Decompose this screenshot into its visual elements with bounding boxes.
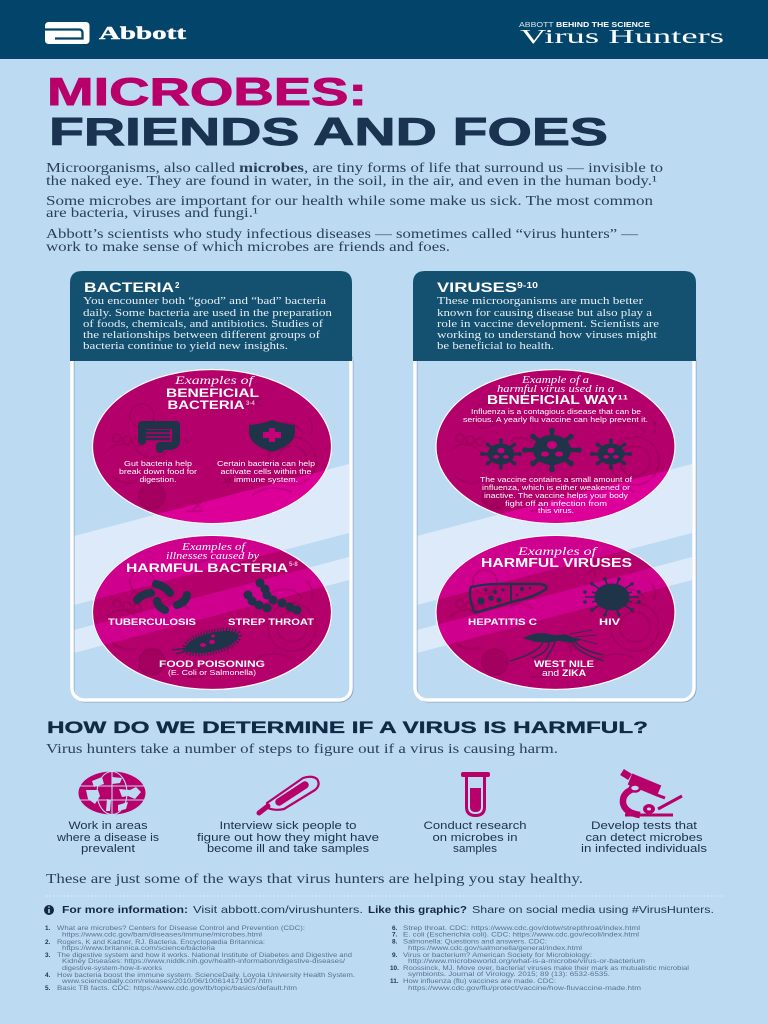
intro text: Microorganisms, also called microbes , are tiny forms of life that surround us — invisible to bbox=[46, 160, 663, 175]
bacteria header: of foods, chemicals, and antibiotics. Studies of bbox=[83, 319, 324, 330]
intro text: Some microbes are important for our health while some make us sick. The most common bbox=[46, 193, 654, 208]
references left column: Basic TB facts. CDC: https://www.cdc.gov/tb/topic/basics/default.htm bbox=[57, 985, 297, 992]
more information line: Visit abbott.com/virushunters. bbox=[193, 904, 363, 916]
step 4: tests: can detect microbes bbox=[586, 832, 703, 844]
references right column: 8. bbox=[392, 938, 398, 946]
step 3: research: Conduct research bbox=[424, 820, 526, 832]
section heading: HOW DO WE DETERMINE IF A VIRUS IS HARMFUL? bbox=[47, 719, 648, 737]
intro text: Abbott’s scientists who study infectious diseases — sometimes called “virus hunters” — bbox=[46, 226, 639, 241]
circle: harmful bacteria: STREP THROAT bbox=[228, 617, 314, 628]
bacteria header: 2 bbox=[175, 281, 180, 290]
references right column: Virus or bacterium? American Society for Microbiology: bbox=[403, 952, 592, 959]
bacteria header: the relationships between different groups of bbox=[83, 330, 321, 341]
circle: beneficial virus: serious. A yearly flu vaccine can help prevent it. bbox=[463, 415, 648, 424]
icon: gut bbox=[142, 425, 176, 449]
circle: harmful bacteria: TUBERCULOSIS bbox=[108, 617, 196, 628]
references left column: digestive-system-how-it-works bbox=[62, 965, 162, 972]
references left column bbox=[45, 925, 355, 992]
references right column: symbionts. Journal of Virology. 2015; 89 (13): 6532-6535. bbox=[408, 971, 610, 978]
step 1: field work: prevalent bbox=[81, 843, 135, 855]
header band bbox=[0, 0, 768, 59]
references right column: 9. bbox=[392, 952, 398, 959]
icon: thermometer bbox=[259, 777, 319, 813]
references left column: https://www.britannica.com/science/bacteria bbox=[62, 945, 216, 952]
references right column bbox=[390, 925, 689, 992]
references right column: E. coli (Escherichia coli). CDC: https://www.cdc.gov/ecoli/index.html bbox=[403, 932, 639, 938]
viruses header: known for causing disease but also play a bbox=[437, 308, 652, 319]
icon: Abbott logo bbox=[45, 22, 90, 44]
circle: beneficial bacteria: digestion. bbox=[140, 475, 176, 484]
step 1: field work: Work in areas bbox=[68, 820, 148, 832]
circle: beneficial virus: influenza, which is either weakened or bbox=[482, 483, 631, 492]
circle: beneficial bacteria: Certain bacteria can help bbox=[217, 459, 315, 468]
circle: beneficial virus: this virus. bbox=[538, 506, 574, 515]
viruses header: role in vaccine development. Scientists are bbox=[437, 319, 659, 330]
references right column: 6. bbox=[392, 925, 398, 932]
circle: harmful viruses: and ZIKA bbox=[542, 668, 586, 679]
references left column: 2. bbox=[45, 939, 51, 946]
intro text bbox=[46, 160, 663, 254]
icon: shield bbox=[249, 420, 295, 452]
circle: beneficial bacteria: 3-4 bbox=[246, 401, 255, 407]
circle: beneficial virus bbox=[435, 368, 676, 524]
step 2: interview: Interview sick people to bbox=[220, 820, 356, 832]
step 3: research: samples bbox=[453, 843, 498, 855]
circle: beneficial bacteria: break down food for bbox=[119, 467, 198, 476]
circle: harmful bacteria: (E. Coli or Salmonella) bbox=[168, 668, 257, 677]
title: MICROBES: bbox=[47, 71, 367, 114]
circle: beneficial bacteria: immune system. bbox=[234, 475, 298, 484]
step 4: tests bbox=[581, 772, 708, 855]
icon: salmonella bacterium bbox=[172, 627, 240, 657]
references right column: 7. bbox=[392, 932, 398, 938]
references left column: 5. bbox=[45, 985, 51, 992]
bacteria header: daily. Some bacteria are used in the preparation bbox=[83, 308, 333, 319]
title bbox=[47, 71, 608, 154]
icon: mosquito bbox=[510, 630, 604, 661]
step 2: interview: become ill and take samples bbox=[207, 843, 370, 855]
panel: viruses bbox=[413, 271, 696, 701]
circle: beneficial virus: inactive. The vaccine helps your body bbox=[484, 491, 628, 500]
circle: beneficial virus: The vaccine contains a small amount of bbox=[480, 475, 633, 484]
references right column: Strep throat. CDC: https://www.cdc.gov/dotw/strepthroat/index.html bbox=[403, 925, 640, 932]
references left column: Kidney Diseases: https://www.niddk.nih.gov/health-information/digestive-diseases/ bbox=[62, 958, 345, 965]
references left column: Rogers, K and Kadner, RJ. Bacteria. Encyclopædia Britannica: bbox=[57, 939, 265, 946]
circle: beneficial bacteria: Gut bacteria help bbox=[124, 459, 192, 468]
circle: beneficial virus: harmful virus used in a bbox=[497, 384, 614, 395]
circle: beneficial bacteria: BACTERIA bbox=[168, 398, 245, 412]
circle: harmful viruses: HIV bbox=[599, 617, 621, 628]
icon: microscope bbox=[622, 772, 682, 816]
references left column: 4. bbox=[45, 972, 51, 979]
references right column: 11. bbox=[390, 978, 399, 985]
step 2: interview bbox=[197, 777, 379, 855]
circle: beneficial virus: Influenza is a contagious disease that can be bbox=[471, 407, 641, 416]
references left column: The digestive system and how it works. National Institute of Diabetes and Digestive and bbox=[57, 952, 353, 959]
step 1: field work bbox=[56, 772, 160, 855]
references left column: https://www.cdc.gov/bam/diseases/immune/microbes.html bbox=[62, 932, 262, 939]
icon: HIV bbox=[583, 577, 641, 617]
icon: globe bbox=[78, 772, 146, 814]
bacteria header bbox=[70, 271, 352, 361]
more information line: For more information: bbox=[62, 904, 188, 916]
circle: harmful bacteria bbox=[92, 535, 332, 690]
closing line: These are just some of the ways that virus hunters are helping you stay healthy. bbox=[46, 871, 583, 886]
series label: ABBOTT BEHIND THE SCIENCE bbox=[519, 22, 650, 29]
title: FRIENDS AND FOES bbox=[49, 111, 608, 154]
circle: beneficial bacteria: Examples of bbox=[174, 375, 255, 387]
icon: flu viruses bbox=[480, 428, 632, 472]
Abbott wordmark: Abbott bbox=[99, 23, 186, 43]
circle: beneficial virus: Example of a bbox=[521, 375, 589, 386]
references right column: 10. bbox=[390, 965, 399, 972]
viruses header: 9-10 bbox=[517, 281, 539, 290]
viruses header: working to understand how viruses might bbox=[437, 330, 657, 341]
circle: beneficial bacteria: activate cells within the bbox=[220, 467, 312, 476]
icon: liver bbox=[470, 584, 546, 612]
bacteria header: BACTERIA bbox=[84, 280, 174, 295]
intro text: are bacteria, viruses and fungi.¹ bbox=[46, 205, 258, 220]
references right column: How influenza (flu) vaccines are made. CDC: bbox=[403, 978, 556, 985]
more information line: Like this graphic? bbox=[368, 904, 467, 916]
step 4: tests: in infected individuals bbox=[581, 843, 708, 855]
more information line: Share on social media using #VirusHunters. bbox=[472, 904, 714, 916]
references left column: How bacteria boost the immune system. ScienceDaily. Loyola University Health System. bbox=[57, 972, 355, 979]
circle: beneficial bacteria bbox=[92, 368, 332, 524]
references right column: Roossinck, MJ. Move over, bacteria! viruses make their mark as mutualistic microbial bbox=[403, 965, 689, 972]
circle: harmful bacteria: 5-8 bbox=[289, 562, 298, 568]
circle: harmful viruses: Examples of bbox=[517, 546, 598, 558]
bacteria header: bacteria continue to yield new insights. bbox=[83, 341, 288, 352]
bacteria header: You encounter both “good” and “bad” bacteria bbox=[83, 296, 326, 307]
viruses header: These microorganisms are much better bbox=[437, 296, 644, 307]
references left column: What are microbes? Centers for Disease Control and Prevention (CDC): bbox=[57, 925, 305, 932]
references right column: https://www.cdc.gov/flu/protect/vaccine/how-fluvaccine-made.htm bbox=[408, 985, 641, 992]
circle: harmful bacteria: HARMFUL BACTERIA bbox=[126, 561, 288, 575]
circle: harmful viruses: HARMFUL VIRUSES bbox=[481, 556, 632, 570]
icon: info bbox=[44, 905, 54, 915]
icon: tuberculosis rods bbox=[137, 584, 187, 610]
more information line bbox=[44, 904, 714, 916]
intro text: the naked eye. They are found in water, in the soil, in the air, and even in the human body.¹ bbox=[46, 173, 657, 188]
circle: harmful bacteria: FOOD POISONING bbox=[159, 659, 265, 670]
references right column: Salmonella: Questions and answers. CDC: bbox=[403, 938, 547, 946]
circle: beneficial virus: fight off an infection from bbox=[505, 499, 607, 508]
circle: harmful viruses: WEST NILE bbox=[534, 659, 594, 670]
viruses header: be beneficial to health. bbox=[437, 341, 554, 352]
viruses header bbox=[413, 271, 696, 361]
step 3: research bbox=[424, 772, 526, 855]
circle: beneficial bacteria: BENEFICIAL bbox=[166, 386, 259, 400]
step 1: field work: where a disease is bbox=[56, 832, 160, 844]
icon: test tube bbox=[461, 772, 490, 816]
circle: harmful bacteria: illnesses caused by bbox=[166, 551, 259, 562]
references left column: www.sciencedaily.com/releases/2010/06/100614171907.htm bbox=[61, 978, 272, 985]
circle: harmful bacteria: Examples of bbox=[181, 542, 248, 553]
circle: harmful viruses: HEPATITIS C bbox=[468, 617, 537, 628]
series label bbox=[519, 22, 724, 48]
references left column: 3. bbox=[45, 952, 51, 959]
step 2: interview: figure out how they might have bbox=[197, 832, 379, 844]
icon: strep chain bbox=[244, 578, 302, 614]
viruses header: VIRUSES bbox=[437, 280, 517, 295]
series label: Virus Hunters bbox=[520, 26, 724, 48]
step 3: research: on microbes in bbox=[432, 832, 518, 844]
references left column: 1. bbox=[45, 925, 51, 932]
step 4: tests: Develop tests that bbox=[591, 820, 697, 832]
intro text: work to make sense of which microbes are friends and foes. bbox=[46, 239, 450, 254]
circle: harmful viruses bbox=[435, 535, 676, 690]
circle: beneficial virus: BENEFICIAL WAY¹¹ bbox=[487, 393, 628, 407]
references right column: http://www.microbeworld.org/what-is-a-microbe/virus-or-bacterium bbox=[408, 958, 645, 965]
references right column: https://www.cdc.gov/salmonella/general/index.html bbox=[408, 945, 582, 952]
section intro: Virus hunters take a number of steps to figure out if a virus is causing harm. bbox=[46, 741, 558, 756]
panel: bacteria bbox=[70, 271, 352, 701]
